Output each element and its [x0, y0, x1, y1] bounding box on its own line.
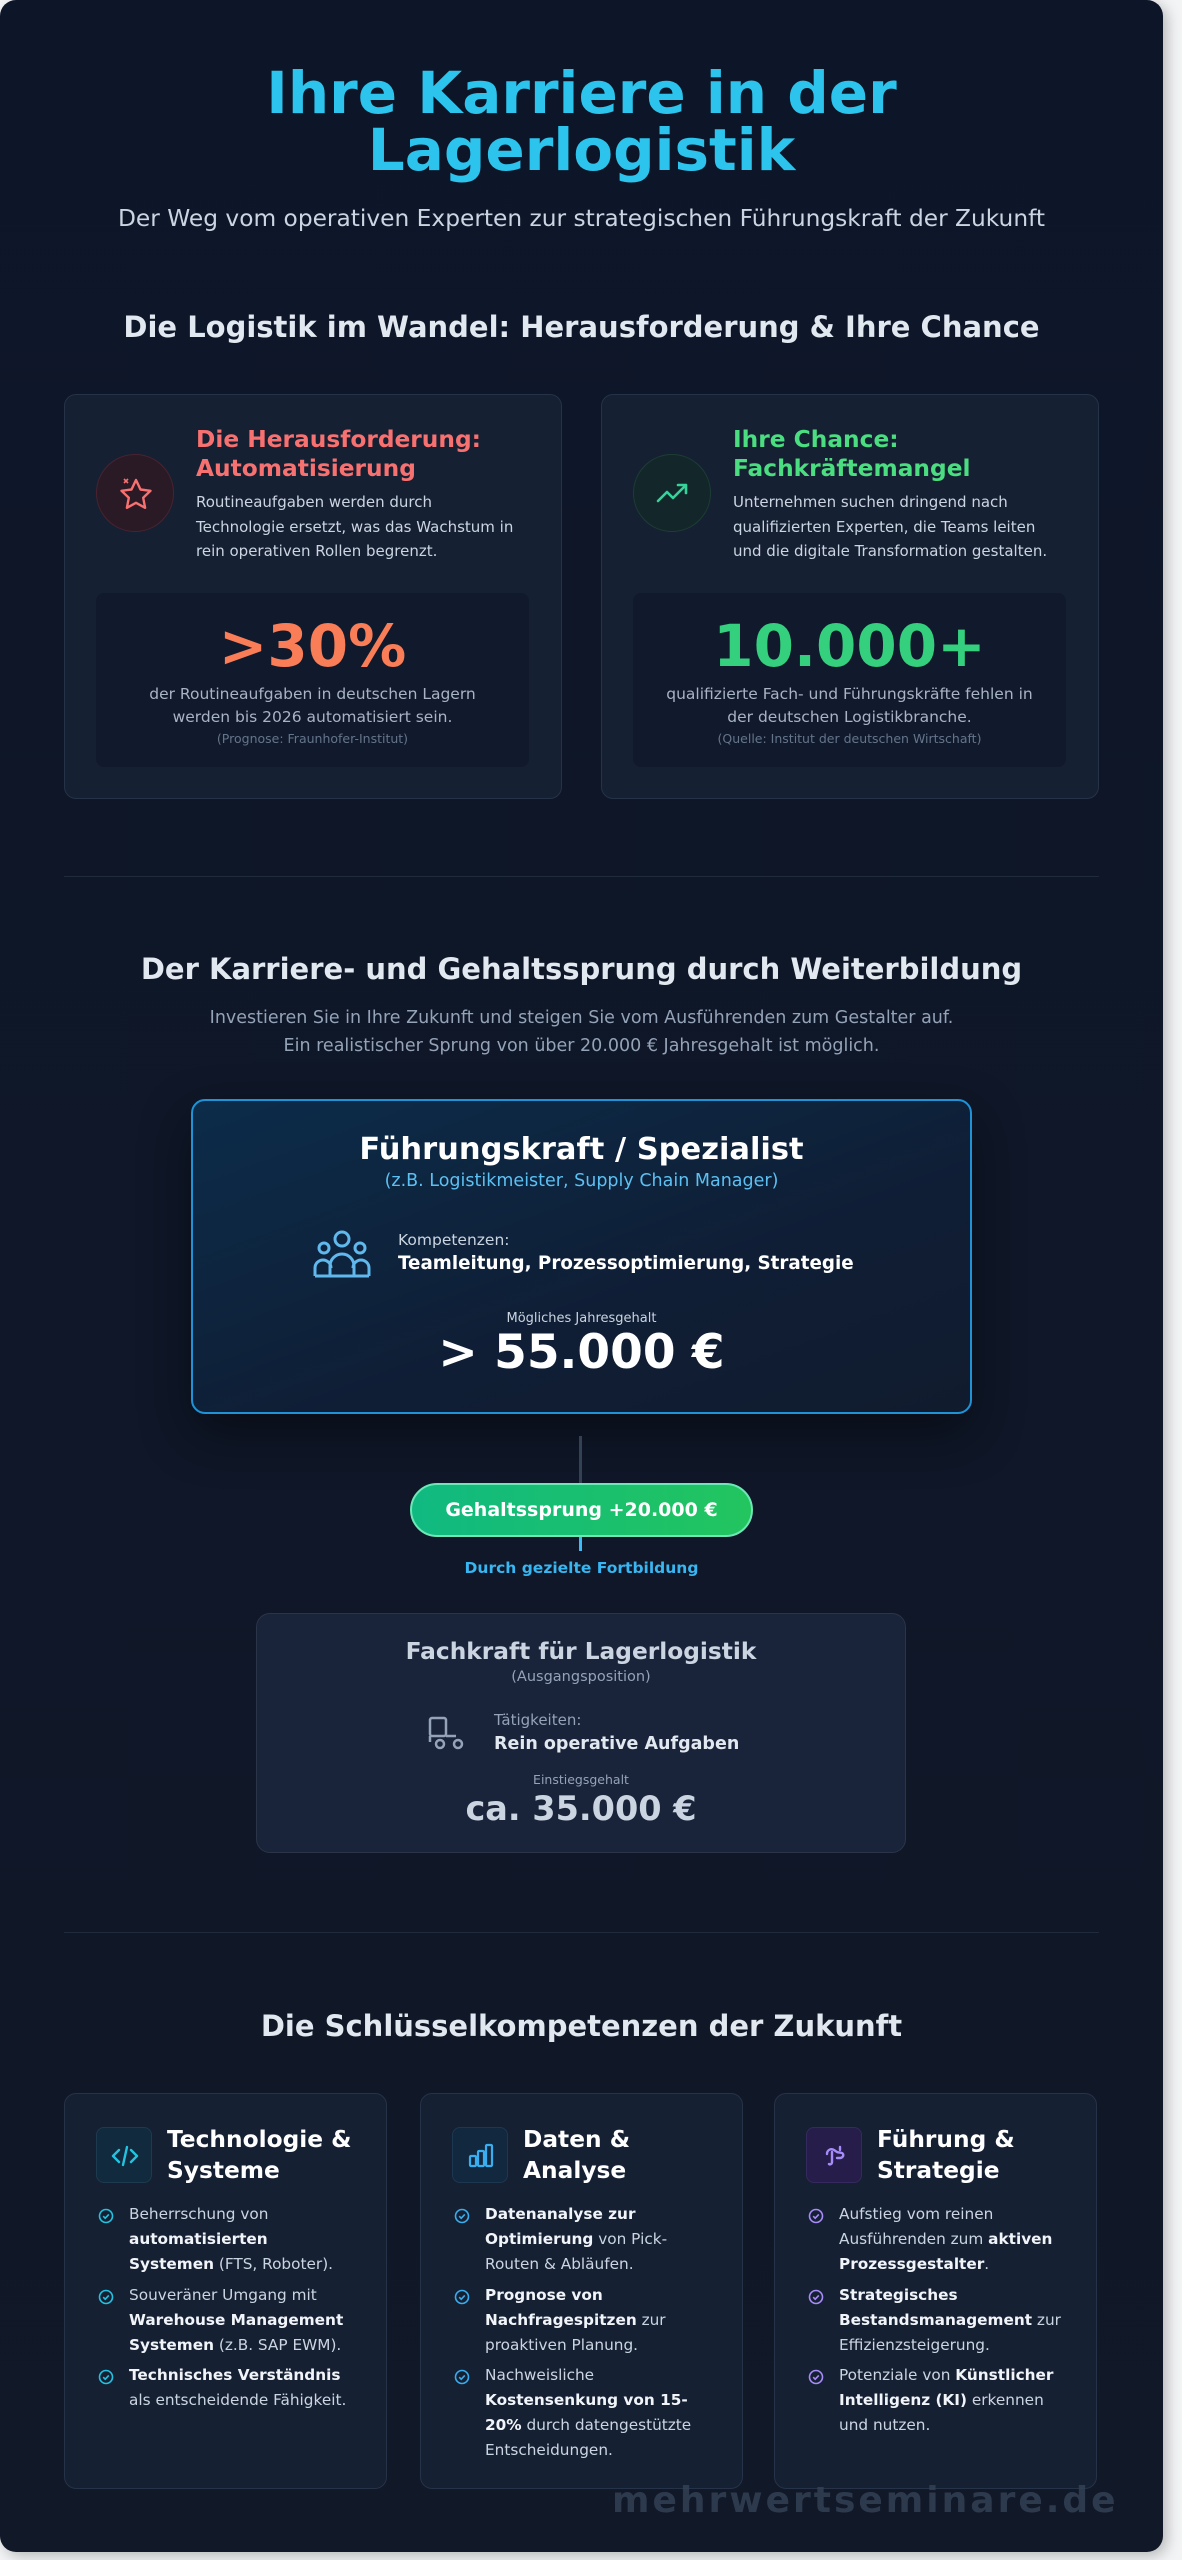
watermark: mehrwertseminare.de: [612, 2480, 1119, 2521]
heading: [733, 426, 970, 482]
list: Strategisches Bestandsmanagement zur Effizienzsteigerung.: [839, 2286, 1061, 2354]
salary: > 55.000 €: [438, 1325, 725, 1380]
arrow: connector: [579, 1436, 582, 1484]
subtitle: (z.B. Logistikmeister, Supply Chain Manager): [385, 1171, 778, 1191]
list: [808, 2205, 1061, 2434]
stat box: >30%: [219, 612, 406, 680]
heading: Logistik im Wandel: Die Logistik im Wandel: Herausforderung & Ihre Chance: [123, 310, 1040, 344]
intro text: Investieren Sie in Ihre Zukunft und steigen Sie vom Ausführenden zum Gestalter auf.: [210, 1008, 953, 1028]
panel: Chance: [601, 394, 1099, 799]
salary: ca. 35.000 €: [465, 1789, 697, 1828]
card: Fachkraft: (Ausgangsposition): [511, 1669, 651, 1685]
card: Führungskraft: [191, 1099, 972, 1414]
icon: bar chart: [452, 2127, 508, 2183]
title: Lagerlogistik: [368, 116, 795, 184]
heading: [196, 426, 481, 482]
label: Fortbildung: Durch gezielte Fortbildung: [465, 1559, 698, 1577]
title: Ihre Karriere in der: [266, 59, 897, 127]
icon: trolley: [428, 1716, 464, 1750]
competencies: Kompetenzen:: [398, 1231, 510, 1249]
heading: Führung &: [877, 2126, 1015, 2153]
card: Fachkraft: Fachkraft für Lagerlogistik: [406, 1638, 756, 1665]
text: [196, 493, 513, 560]
intro text: [210, 1008, 953, 1056]
list: Datenanalyse zur Optimierung von Pick-Routen & Abläufen.: [485, 2205, 667, 2273]
list: [98, 2205, 346, 2409]
card: Fachkraft: [256, 1613, 906, 1853]
list: Potenziale von Künstlicher Intelligenz (KI) erkennen und nutzen.: [839, 2366, 1053, 2434]
stat box: der Routineaufgaben in deutschen Lagern: [149, 685, 476, 703]
list: Beherrschung von automatisierten Systemen (FTS, Roboter).: [129, 2205, 333, 2273]
panel: Technologie: [64, 2093, 387, 2489]
intro text: Ein realistischer Sprung von über 20.000 € Jahresgehalt ist möglich.: [284, 1036, 879, 1056]
heading: [523, 2126, 630, 2184]
heading: Strategie: [877, 2157, 1000, 2184]
competencies: Teamleitung, Prozessoptimierung, Strategie: [398, 1253, 854, 1274]
heading: Ihre Chance:: [733, 426, 899, 453]
text: und die digitale Transformation gestalten.: [733, 542, 1047, 560]
panel: Führung: [774, 2093, 1097, 2489]
list: [454, 2205, 691, 2459]
text: qualifizierten Experten, die Teams leiten: [733, 518, 1035, 536]
heading: Systeme: [167, 2157, 280, 2184]
activities: Tätigkeiten:: [494, 1711, 581, 1729]
salary: [465, 1772, 697, 1828]
stat box: [633, 593, 1066, 767]
heading: Daten &: [523, 2126, 630, 2153]
title: [266, 59, 897, 184]
heading: [167, 2126, 351, 2184]
subtitle: Der Weg vom operativen Experten zur strategischen Führungskraft der Zukunft: [118, 205, 1045, 232]
list: Technisches Verständnis als entscheidende Fähigkeit.: [129, 2366, 346, 2409]
text: Technologie ersetzt, was das Wachstum in: [196, 518, 513, 536]
stat box: [96, 593, 529, 767]
heading: Schlüsselkompetenzen: Die Schlüsselkompetenzen der Zukunft: [261, 2009, 902, 2043]
list: Prognose von Nachfragespitzen zur proaktiven Planung.: [485, 2286, 666, 2354]
activities: [494, 1711, 739, 1754]
panel: Herausforderung: [64, 394, 562, 799]
text: Routineaufgaben werden durch: [196, 493, 432, 511]
competencies: [398, 1231, 854, 1274]
icon: trend up: [633, 454, 711, 532]
list: Nachweisliche Kostensenkung von 15-20% durch datengestützte Entscheidungen.: [485, 2366, 691, 2459]
salary: Mögliches Jahresgehalt: [506, 1311, 656, 1326]
icon: code: [96, 2127, 152, 2183]
stat box: der deutschen Logistikbranche.: [727, 708, 972, 726]
list: Souveräner Umgang mit Warehouse Management Systemen (z.B. SAP EWM).: [129, 2286, 343, 2354]
text: rein operativen Rollen begrenzt.: [196, 542, 437, 560]
heading: Die Herausforderung:: [196, 426, 481, 453]
text: [733, 493, 1047, 560]
icon: strategy: [806, 2127, 862, 2183]
list: Aufstieg vom reinen Ausführenden zum aktiven Prozessgestalter.: [839, 2205, 1052, 2273]
stat box: (Prognose: Fraunhofer-Institut): [217, 731, 408, 746]
heading: Fachkräftemangel: [733, 455, 970, 482]
icon: star warning: [96, 454, 174, 532]
heading: Analyse: [523, 2157, 626, 2184]
stat box: (Quelle: Institut der deutschen Wirtschaft): [718, 731, 981, 746]
heading: Technologie &: [167, 2126, 351, 2153]
heading: Karrieresprung: Der Karriere- und Gehaltssprung durch Weiterbildung: [141, 952, 1022, 986]
heading: [877, 2126, 1015, 2184]
stat box: qualifizierte Fach- und Führungskräfte fehlen in: [666, 685, 1033, 703]
icon: team: [314, 1230, 370, 1278]
stat box: 10.000+: [713, 612, 986, 680]
salary: Einstiegsgehalt: [533, 1772, 629, 1787]
pill: Gehaltssprung: Gehaltssprung +20.000 €: [445, 1499, 718, 1521]
panel: Daten: [420, 2093, 743, 2489]
text: Unternehmen suchen dringend nach: [733, 493, 1008, 511]
stat box: werden bis 2026 automatisiert sein.: [173, 708, 452, 726]
title: Führungskraft / Spezialist: [359, 1132, 804, 1167]
pill: Gehaltssprung: [410, 1483, 753, 1537]
heading: Automatisierung: [196, 455, 416, 482]
activities: Rein operative Aufgaben: [494, 1734, 739, 1754]
